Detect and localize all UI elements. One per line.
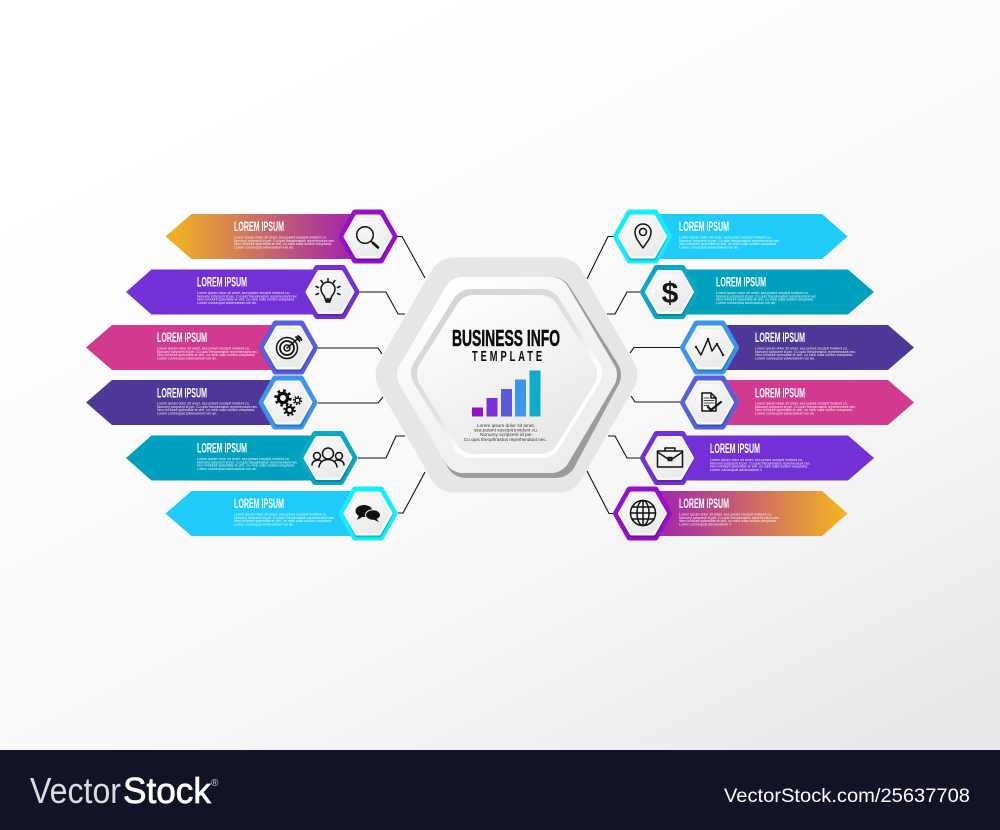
arrow bar [166,214,368,259]
item text: Lorem ipsum dolor sit amet, sea putant suscipit invidunt cu. [157,400,250,406]
item text: Nonumy scripserit id per. Cu quis theophrastus reprehendunt nec. [716,293,817,298]
item text: Nonumy scripserit id per. Cu quis theophrastus reprehendunt nec. [679,515,780,520]
item text: Nonumy scripserit id per. Cu quis theophrastus reprehendunt nec. [234,238,335,243]
icon: magnifier [357,227,378,248]
center caption: Lorem ipsum dolor sit amet, [477,423,535,428]
hexagon badge [262,378,314,426]
center caption [464,423,547,442]
item text [679,219,780,250]
item text: LOREM IPSUM [157,330,207,345]
item text: Lorem ipsum dolor sit amet, sea putant suscipit invidunt cu. [197,290,290,295]
item text [755,330,856,360]
connector [607,292,640,314]
item text [157,330,258,360]
icon: gears [276,391,301,415]
item text [755,386,856,416]
item text: Vero invidunt splendide te vim, cu mea nulla nullam voluptaria. [679,518,777,523]
panel: left item 2 idea [126,268,405,316]
item text: Lorem consequat adversarium vel an. [157,356,217,360]
connector [631,396,680,402]
hexagon badge [683,324,736,372]
item text: LOREM IPSUM [157,386,207,400]
item text: Vero invidunt splendide te vim, cu mea nulla nullam voluptaria. [755,407,853,412]
hexagon badge [643,268,696,316]
item text: Lorem consequat adversarium v [710,467,762,472]
panel: right item 3 trend [630,324,914,372]
item text: Vero invidunt splendide te vim, cu mea nulla nullam voluptaria. [234,241,332,246]
item text: Lorem consequat adversarium vel an. [716,300,776,305]
item text: LOREM IPSUM [234,219,284,234]
item text: Vero invidunt splendide te vim, cu mea nulla nullam voluptaria. [679,241,777,246]
heading: business info template [452,325,560,365]
item text: Nonumy scripserit id per. Cu quis theophrastus reprehendunt nec. [234,515,335,520]
connector [630,348,680,353]
item text: Vero invidunt splendide te vim, cu mea nulla nullam voluptaria. [716,297,814,302]
item text: Vero invidunt splendide te vim, cu mea nulla nullam voluptaria. [157,352,255,357]
connector [587,471,613,514]
item text: Lorem ipsum dolor sit amet, sea putant suscipit invidunt cu. [234,234,327,240]
arrow bar [643,214,848,259]
item text: Nonumy scripserit id per. Cu quis theophrastus reprehendunt nec. [710,460,811,465]
item text: LOREM IPSUM [679,219,729,234]
item text: LOREM IPSUM [755,386,805,400]
item text [197,440,298,471]
logo: VectorStock [30,770,219,811]
item text: Nonumy scripserit id per. Cu quis theophrastus reprehendunt nec. [197,293,298,298]
icon: people [312,448,344,467]
item text: Lorem ipsum dolor sit amet, sea putant suscipit invidunt cu. [234,512,327,516]
item text: Lorem ipsum dolor sit amet, sea putant suscipit invidunt cu. [755,400,848,406]
connector [318,397,383,403]
item text: Lorem ipsum dolor sit amet, sea putant suscipit invidunt cu. [197,456,290,461]
item text: Nonumy scripserit id per. Cu quis theophrastus reprehendunt nec. [755,349,856,354]
item text [710,441,811,472]
arrow bar [126,436,328,480]
item text: Vero invidunt splendide te vim, cu mea nulla nullam voluptaria. [197,463,295,468]
center caption: sea putant suscipit invidunt cu. [474,428,538,432]
image id: VectorStock.com/25637708 [724,785,970,807]
panel: left item 5 team [126,434,405,482]
footer bar [0,750,1000,830]
item text [197,274,298,305]
icon: map pin [635,224,651,248]
item text: Lorem ipsum dolor sit amet, sea putant suscipit invidunt cu. [679,234,772,240]
logo: VectorStock: Vector [30,770,121,811]
item text [234,219,335,250]
panel: left item 3 target [86,324,382,372]
item text: LOREM IPSUM [710,441,760,456]
arrow bar [126,270,330,314]
item text [716,274,817,305]
item text: Nonumy scripserit id per. Cu quis theophrastus reprehendunt nec. [197,459,298,464]
icon: light bulb [316,278,340,302]
item text: Lorem consequat adversarium vel an. [679,244,739,250]
arrow bar [166,491,368,536]
hexagon badge [683,378,736,426]
panel: left item 4 settings [86,378,383,426]
arrow bar [86,380,288,425]
item text: Vero invidunt splendide te vim, cu mea nulla nullam voluptaria. [157,407,255,412]
item text: Lorem ipsum dolor sit amet, sea putant suscipit invidunt cu. [710,457,803,462]
central hexagon [400,282,612,468]
arrow bar [710,380,914,425]
hexagon badge [342,490,394,538]
panel: right item 6 globe [587,471,848,538]
item text: Vero invidunt splendide te vim, cu mea nulla nullam voluptaria. [234,518,332,523]
hexagon badge [262,324,315,372]
hexagon badge [302,434,354,482]
panel: right item 5 briefcase [608,434,874,482]
connector [398,472,425,513]
connector [357,292,405,314]
heading: business info template: TEMPLATE [472,348,542,365]
item text: Lorem consequat adversarium vel an. [234,522,294,526]
item text: LOREM IPSUM [716,274,766,290]
item text: Nonumy scripserit id per. Cu quis theophrastus reprehendunt nec. [157,404,258,409]
arrow bar [86,325,288,370]
logo: VectorStock: ® [211,778,219,789]
item text: Vero invidunt splendide te vim, cu mea nulla nullam voluptaria. [710,464,808,469]
bar chart [472,370,540,416]
icon: briefcase [658,448,682,467]
item text [679,496,780,526]
item text [157,386,258,416]
item text: Nonumy scripserit id per. Cu quis theophrastus reprehendunt nec. [679,238,780,243]
hexagon badge [342,212,394,260]
item text: Lorem ipsum dolor sit amet, sea putant suscipit invidunt cu. [755,346,848,350]
item text: Lorem ipsum dolor sit amet, sea putant suscipit invidunt cu. [716,290,809,295]
item text: Lorem consequat adversarium vel an. [197,300,257,305]
item text: Vero invidunt splendide te vim, cu mea nulla nullam voluptaria. [197,297,295,302]
panel: left item 6 chat [166,472,425,538]
item text: LOREM IPSUM [755,330,805,345]
item text: Lorem consequat adversarium vel an. [157,410,217,416]
item text [234,496,335,526]
item text: Lorem consequat adversarium vel an. [755,410,815,416]
item text: LOREM IPSUM [197,440,247,456]
connector [358,436,405,458]
panel: right item 2 finance [607,268,874,316]
icon: globe [630,500,656,526]
item text: Lorem consequat adversarium v [679,522,731,526]
hexagon badge [616,212,669,260]
connector [397,236,425,278]
icon: dollar sign: $ [662,277,679,310]
arrow bar [643,491,848,536]
item text: Vero invidunt splendide te vim, cu mea nulla nullam voluptaria. [755,352,853,357]
icon: zigzag line [695,338,724,356]
item text: Nonumy scripserit id per. Cu quis theophrastus reprehendunt nec. [157,349,258,354]
logo: VectorStock: Stock [123,770,212,811]
connector [318,348,382,354]
icon: document with check [702,393,721,411]
arrow bar [670,436,874,480]
item text: Lorem ipsum dolor sit amet, sea putant suscipit invidunt cu. [679,512,772,516]
icon: chat bubbles [356,505,380,522]
arrow bar [710,325,914,370]
arrow bar [670,270,874,314]
hexagon badge [643,434,696,482]
item text: Lorem consequat adversarium vel an. [197,466,257,471]
icon: target [276,336,302,358]
connector [608,436,640,458]
item text: LOREM IPSUM [197,274,247,290]
item text: Lorem consequat adversarium vel an. [755,356,815,360]
center caption: Cu quis theophrastus reprehendunt nec. [464,437,547,442]
item text: Nonumy scripserit id per. Cu quis theophrastus reprehendunt nec. [755,404,856,409]
panel: left item 1 search [166,212,425,278]
connector [587,236,613,279]
hexagon badge [616,490,669,538]
hexagon badge [304,268,356,316]
item text: LOREM IPSUM [234,496,284,511]
item text: LOREM IPSUM [679,496,729,511]
panel: right item 1 location [587,212,848,279]
item text: Lorem consequat adversarium vel an. [234,244,294,250]
item text: Lorem ipsum dolor sit amet, sea putant suscipit invidunt cu. [157,346,250,350]
center caption: Nonumy scripserit id per. [480,432,533,437]
heading: business info template: BUSINESS INFO [452,325,560,351]
panel: right item 4 document [631,378,914,426]
